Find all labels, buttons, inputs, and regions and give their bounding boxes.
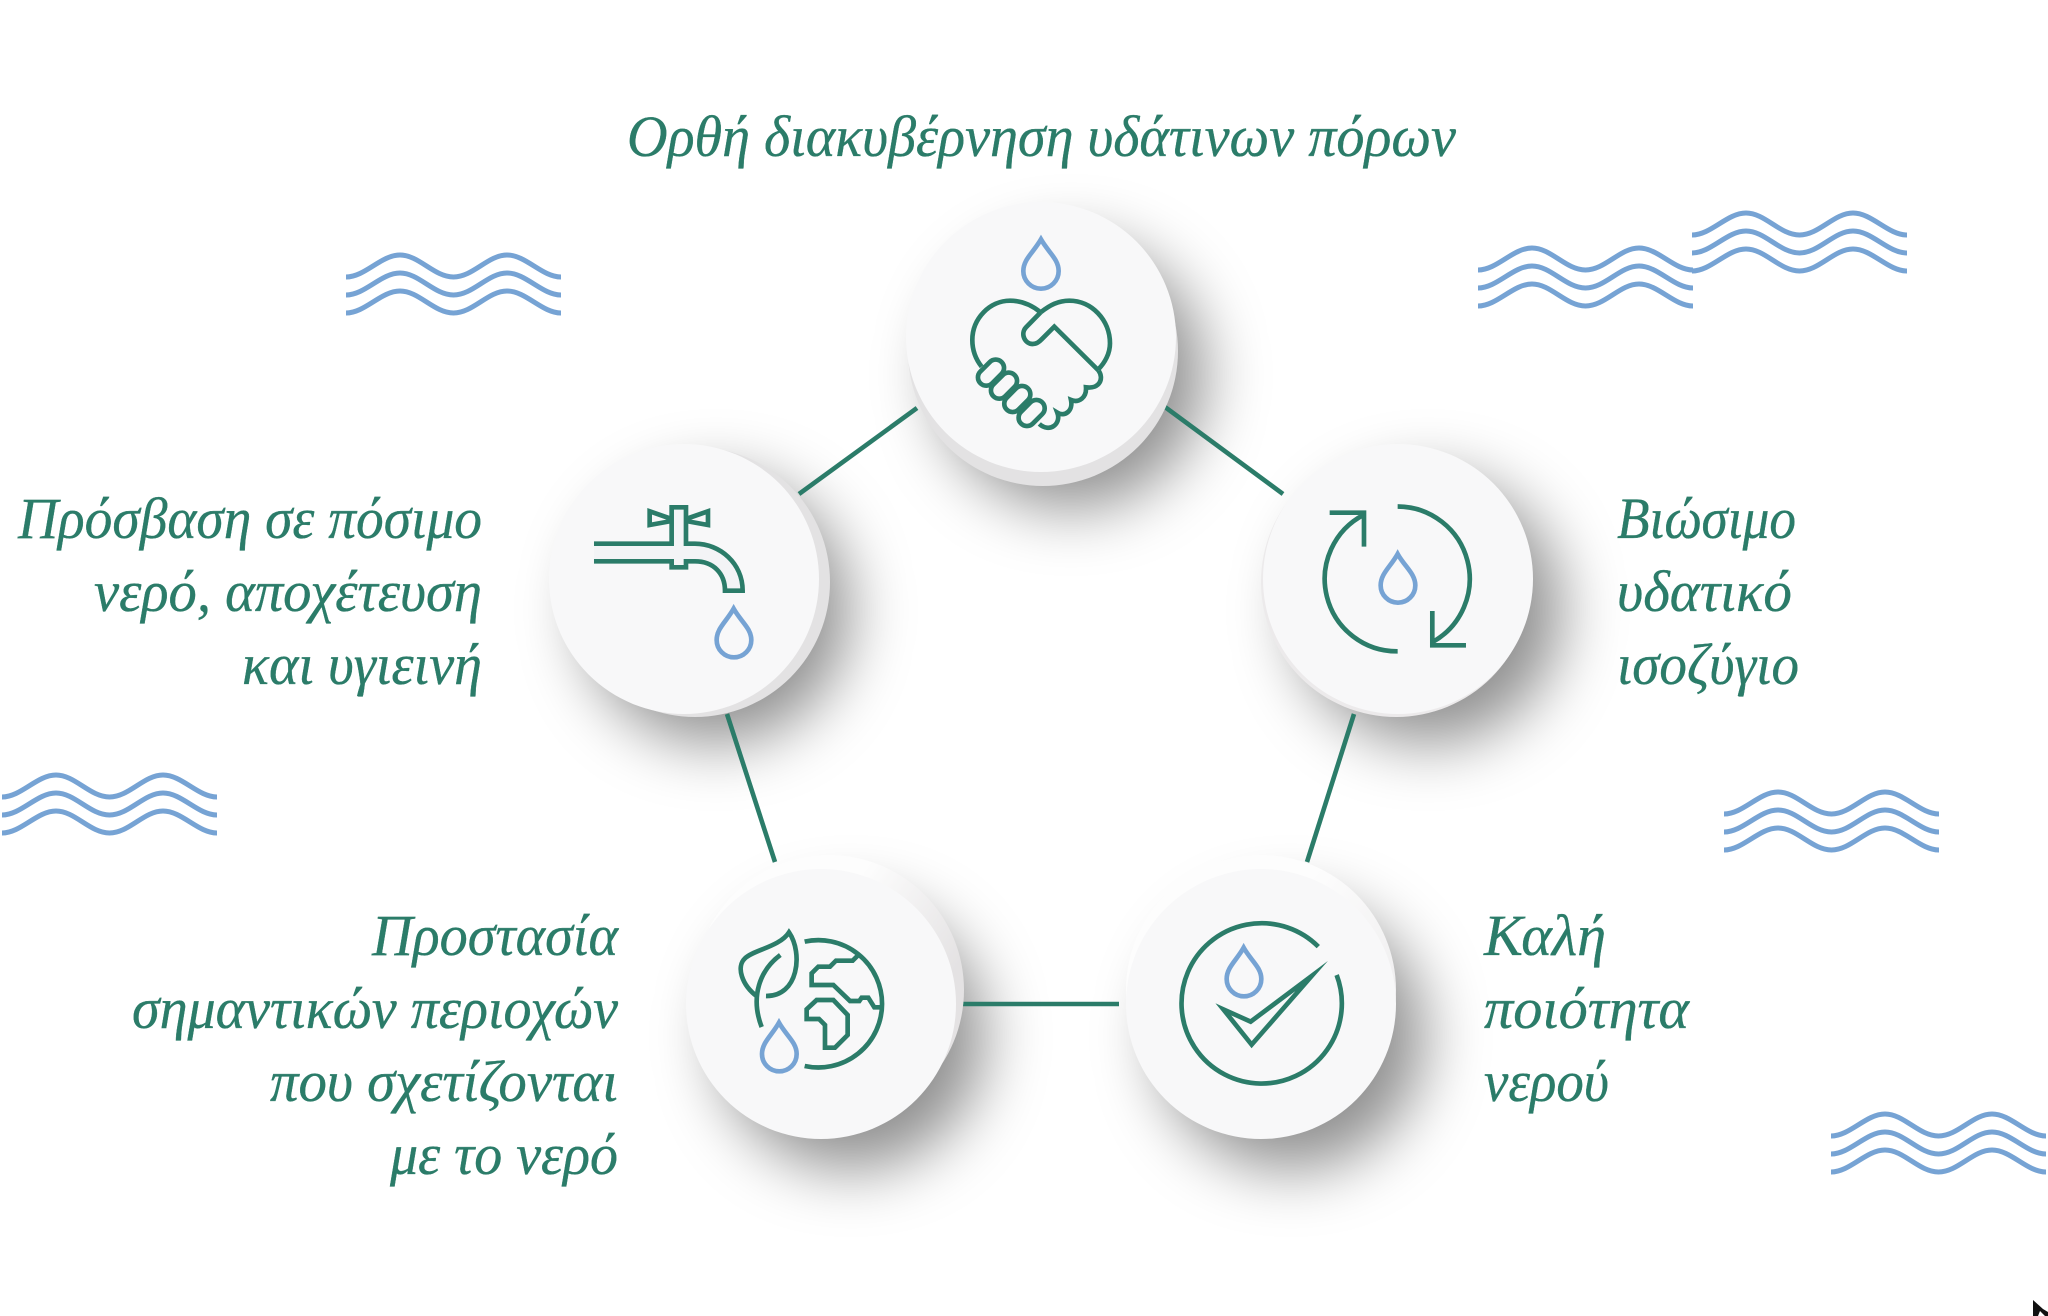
label: good water quality: Καλή (1483, 903, 1606, 968)
icon: check mark in circle with water drop (1182, 923, 1342, 1084)
icon: tap with water drop (594, 507, 751, 657)
title: Ορθή διακυβέρνηση υδάτινων πόρων (627, 104, 1456, 169)
icon: handshake heart with water drop (972, 239, 1110, 429)
label: drinking water and sanitation (17, 486, 482, 697)
label: protection of water-related areas: σημαντικών περιοχών (132, 976, 618, 1041)
icon: earth, leaf and water drop (741, 932, 883, 1071)
decorative wave: middle left (2, 775, 217, 833)
label: good water quality (1483, 903, 1691, 1114)
label: sustainable water balance: Βιώσιμο (1617, 486, 1796, 551)
node: protected areas, earth and leaf icon (686, 855, 964, 1139)
label: good water quality: ποιότητα (1484, 976, 1691, 1041)
label: drinking water and sanitation: Πρόσβαση σε πόσιμο (17, 486, 482, 551)
label: protection of water-related areas: με το νερό (389, 1122, 618, 1187)
label: sustainable water balance: υδατικό (1617, 559, 1792, 624)
node: water quality, check mark icon (1126, 855, 1396, 1139)
label: protection of water-related areas: που σχετίζονται (270, 1049, 618, 1114)
label: good water quality: νερού (1484, 1049, 1609, 1114)
label: protection of water-related areas: Προστασία (371, 903, 619, 968)
node: governance, handshake heart icon (906, 202, 1178, 486)
decorative wave: upper left (346, 255, 561, 313)
label: sustainable water balance: ισοζύγιο (1617, 632, 1799, 697)
node: water balance, cycle icon (1261, 444, 1533, 717)
label: drinking water and sanitation: νερό, αποχέτευση (94, 559, 482, 624)
decorative wave: upper right second (1478, 248, 1693, 306)
connector lines of the pentagon (727, 407, 1354, 1004)
decorative wave: upper right (1692, 213, 1907, 271)
label: protection of water-related areas (132, 903, 619, 1187)
icon: cycle arrows with water drop (1325, 506, 1470, 651)
label: drinking water and sanitation: και υγιεινή (242, 632, 482, 697)
decorative wave: lower right (1831, 1114, 2046, 1172)
label: sustainable water balance (1617, 486, 1799, 697)
decorative wave: middle right (1724, 792, 1939, 850)
node: drinking water, tap icon (549, 444, 830, 717)
icon: mouse cursor (2033, 1300, 2048, 1316)
